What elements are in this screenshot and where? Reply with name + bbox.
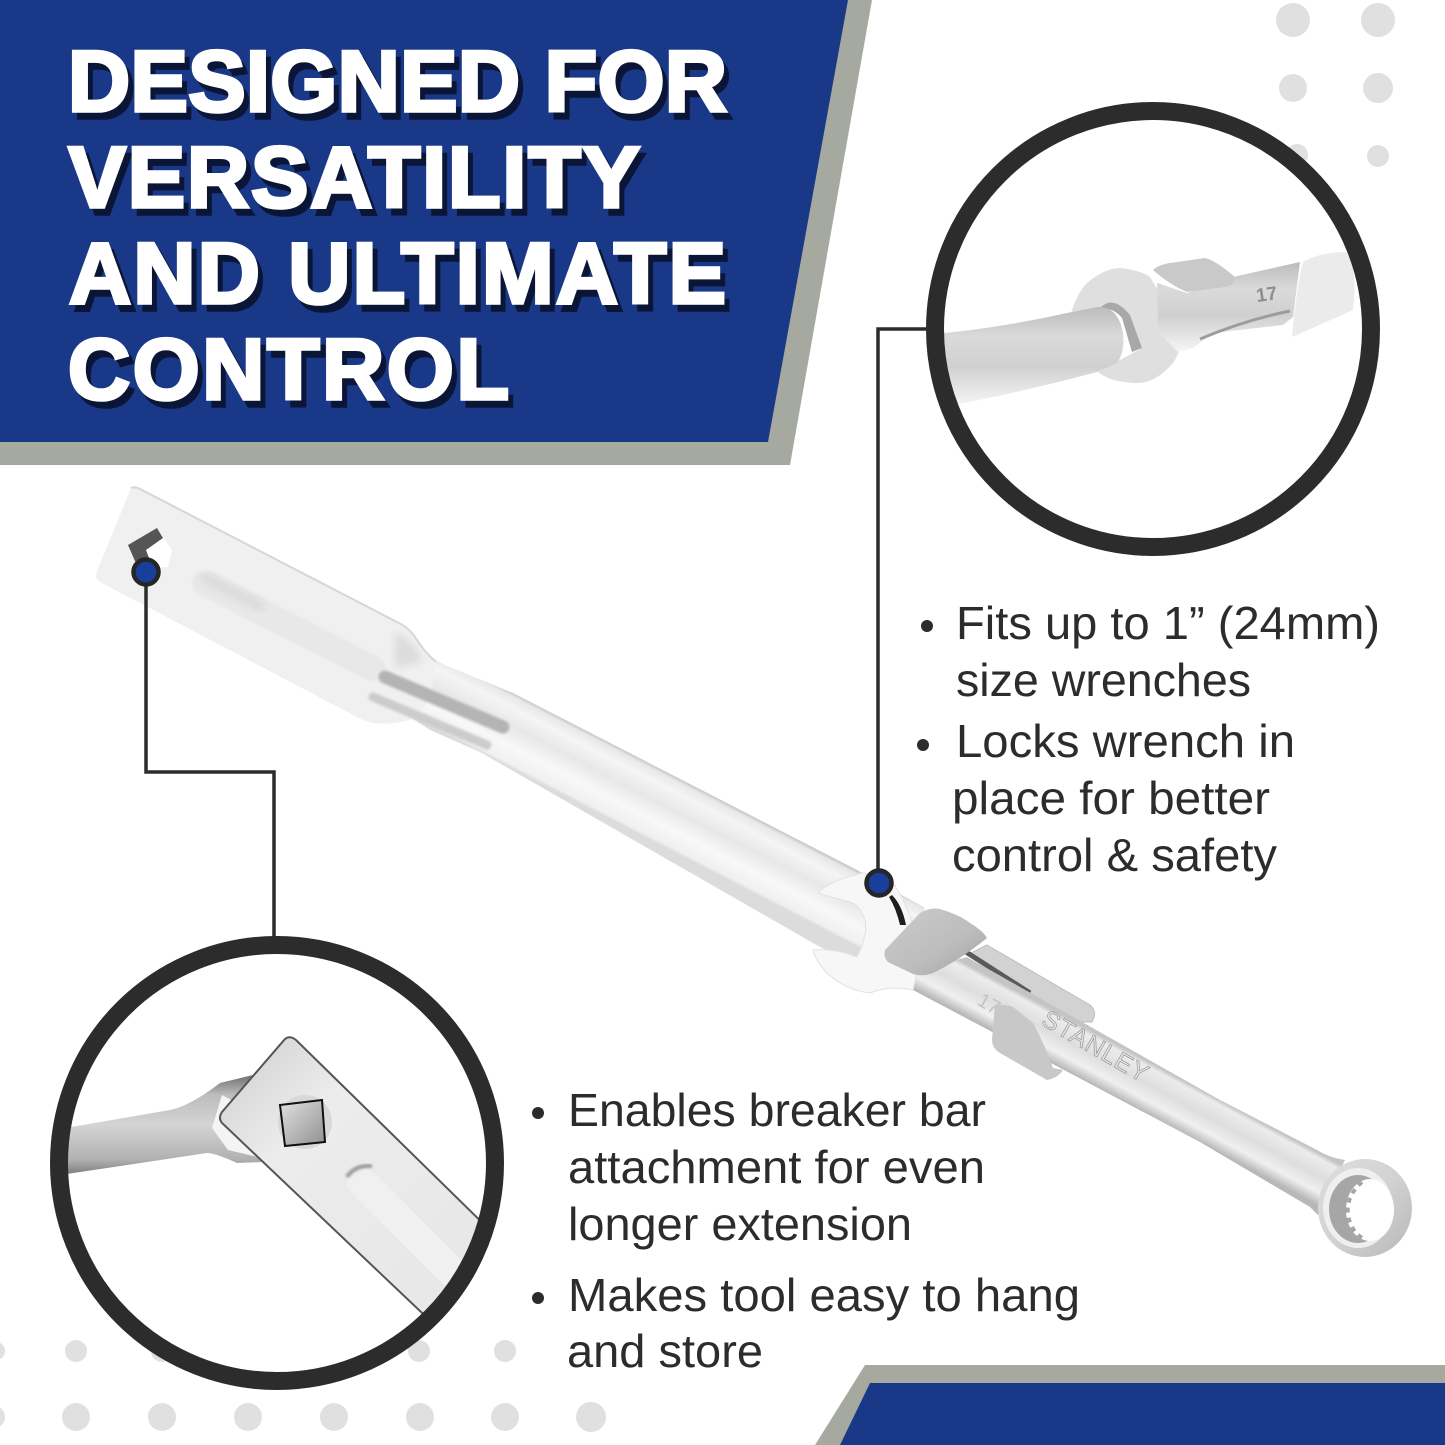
knurled grip shading: [385, 677, 503, 727]
slot: [431, 1249, 461, 1286]
hole: [278, 1095, 332, 1149]
title: VERSATILITY: [74, 137, 645, 233]
bullet list: bottom: longer extension: [568, 1198, 912, 1250]
jaw inner face: [1100, 302, 1142, 352]
main product image: wrench extender: 17: [974, 989, 1004, 1019]
bullet list: bottom: [532, 1084, 1080, 1377]
background dots: bottom left: [0, 1340, 606, 1432]
flat head soft edge: [131, 487, 436, 662]
callout line: left: [146, 572, 274, 940]
bullet list: top right: place for better: [952, 772, 1270, 824]
extender bar behind wrench: [967, 945, 1095, 1022]
callout line: right: [878, 329, 928, 875]
dark gap at jaw: [889, 895, 906, 925]
square drive: [280, 1100, 325, 1146]
wrench handle: [1157, 262, 1300, 352]
detail circle: square drive: [59, 945, 500, 1381]
bottom right corner banner: [815, 1365, 1445, 1445]
bullet list: bottom: Makes tool easy to hang: [568, 1269, 1080, 1321]
title: CONTROL: [68, 322, 509, 418]
bullet list: top right: control & safety: [952, 829, 1278, 881]
bullet list: bottom: attachment for even: [568, 1141, 985, 1193]
marker dot: jaw: [866, 870, 892, 896]
marker dot: hex hole: [134, 560, 158, 584]
bullet list: top right: Fits up to 1” (24mm): [956, 597, 1380, 649]
bullet list: bottom: and store: [567, 1325, 763, 1377]
bar through jaw: [935, 307, 1123, 406]
bullet list: top right: Locks wrench in: [956, 715, 1295, 767]
slot in flat head: [205, 583, 372, 668]
extender shaft: [385, 655, 925, 985]
bullet list: top right: size wrenches: [956, 654, 1251, 706]
title: AND ULTIMATE: [74, 233, 731, 329]
retaining clip 2: [992, 1005, 1063, 1080]
open jaw: [1068, 268, 1181, 383]
clip: [1153, 258, 1235, 292]
extender flat head: [96, 487, 436, 724]
ring end: [1318, 1159, 1412, 1257]
title: DESIGNED FOR: [68, 34, 727, 130]
second clip: [1292, 252, 1355, 337]
shoulder shading: [395, 632, 422, 668]
wrench handle: [893, 957, 1345, 1215]
title: AND ULTIMATE: [69, 226, 726, 322]
background dots: top right: [1276, 3, 1395, 167]
engraved size mark: 17: [1255, 283, 1279, 307]
bullet list: bottom: Enables breaker bar: [568, 1084, 986, 1136]
title: CONTROL: [73, 329, 514, 425]
title: DESIGNED FOR: [73, 41, 732, 137]
detail circle: locked wrench: [935, 111, 1371, 547]
shaft: [60, 1075, 262, 1175]
header banner: [0, 0, 872, 465]
wrench open jaw: [813, 873, 920, 993]
title: [68, 34, 732, 425]
flat head: [219, 1036, 479, 1314]
engraved markings: STANLEY: [1037, 1005, 1153, 1088]
main product image: wrench extender: [96, 487, 1412, 1257]
title: VERSATILITY: [68, 130, 640, 226]
bullet list: top right: [917, 597, 1380, 881]
hex hole: [129, 529, 172, 572]
retaining clip 1: [884, 908, 987, 975]
neck highlight: [212, 1095, 256, 1156]
